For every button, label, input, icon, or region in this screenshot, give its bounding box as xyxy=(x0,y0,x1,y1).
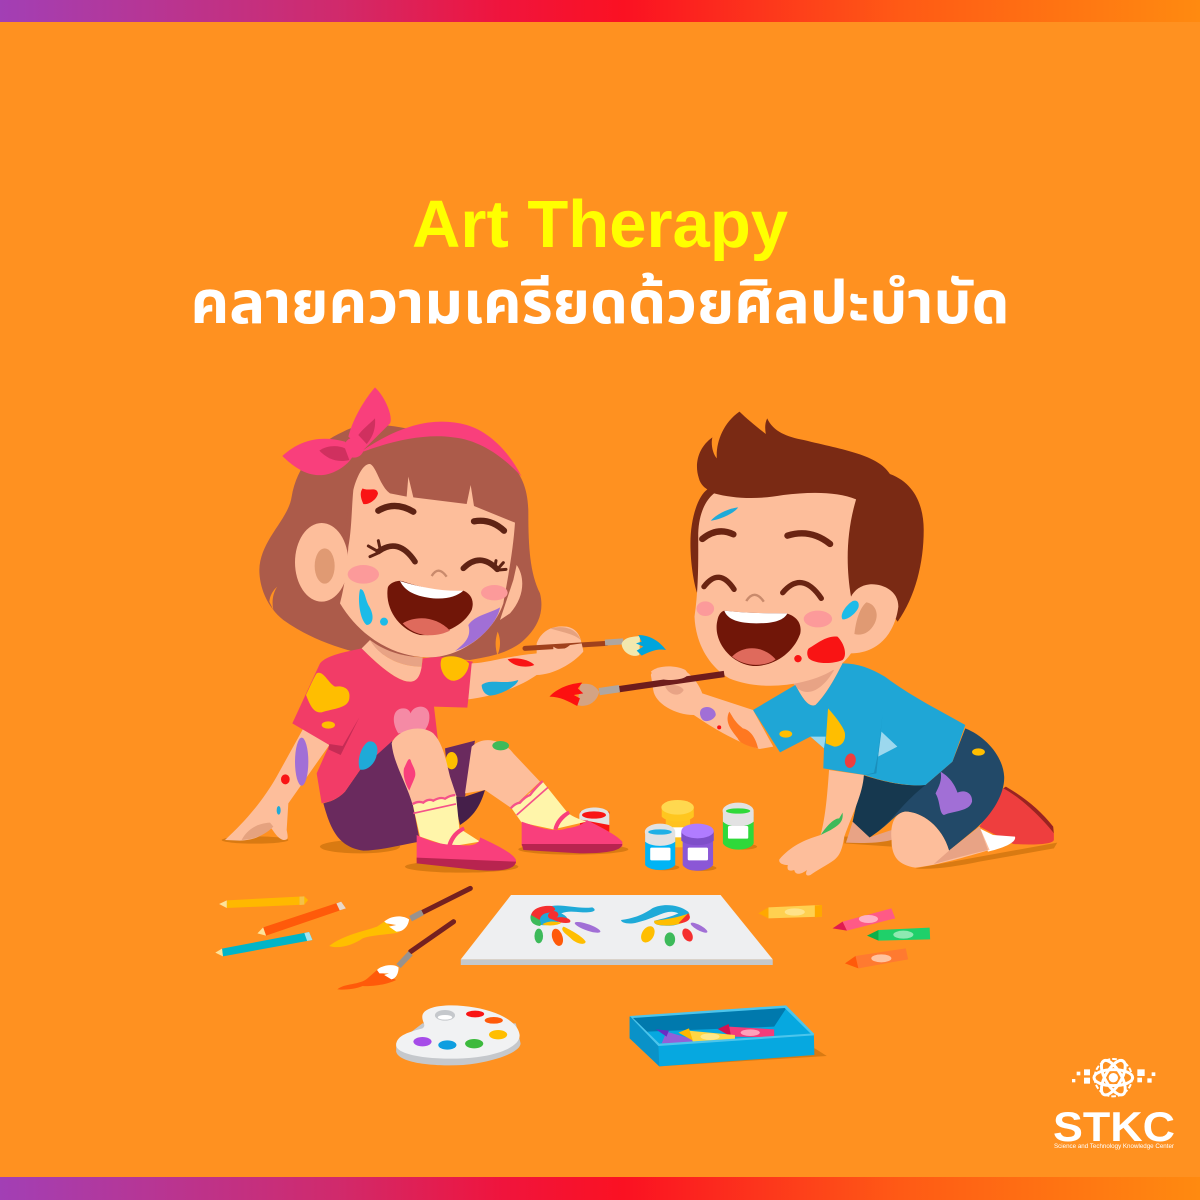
title: Art Therapy: Art Therapy xyxy=(412,187,788,262)
face paint xyxy=(711,507,738,521)
back leg, sock and shoe xyxy=(465,740,540,808)
back arm xyxy=(225,728,329,841)
back lower arm/leg shadow xyxy=(846,822,892,843)
nose xyxy=(432,571,447,577)
shorts xyxy=(853,728,1004,851)
logo tagline: Science and Technology Knowledge Center xyxy=(1054,1144,1174,1150)
illustration: girl painting xyxy=(222,387,666,873)
front leg, sock and shoe xyxy=(392,729,457,805)
sock xyxy=(979,828,1015,852)
hairband and bow xyxy=(282,387,522,477)
ear xyxy=(295,523,348,602)
pencil: teal xyxy=(215,932,312,956)
painting arm and hand xyxy=(651,667,773,749)
shirt xyxy=(753,663,965,785)
pencil: yellow xyxy=(219,896,308,908)
brush: blue xyxy=(525,635,666,656)
bottom gradient bar xyxy=(0,1177,1200,1200)
eyebrows and eyes xyxy=(368,506,506,570)
hair xyxy=(690,412,924,622)
jar: purple xyxy=(681,824,714,871)
nose xyxy=(746,595,764,602)
knee xyxy=(891,812,990,868)
face paint xyxy=(361,488,378,504)
illustration: boy painting xyxy=(549,412,1057,875)
title block xyxy=(190,187,1010,336)
shoe xyxy=(979,788,1054,845)
crayons in box xyxy=(656,1024,774,1043)
logo emblem xyxy=(1072,1057,1155,1098)
brush: yellow paint xyxy=(329,888,470,947)
mouth xyxy=(387,581,473,635)
jar: yellow xyxy=(661,800,694,847)
neck xyxy=(795,663,843,705)
logo wordmark: STKC xyxy=(1053,1103,1175,1150)
handprint: right xyxy=(621,905,709,946)
crayon: green xyxy=(867,928,930,941)
face xyxy=(694,493,898,686)
support arm and hand xyxy=(779,770,864,875)
cheeks xyxy=(697,601,714,616)
face xyxy=(340,464,515,657)
bangs hair detail xyxy=(344,487,352,547)
handprint: left xyxy=(530,906,602,947)
cheeks xyxy=(348,565,379,584)
brush: red xyxy=(549,674,724,706)
jar: blue xyxy=(645,824,675,870)
paint jar behind shoe xyxy=(579,807,609,832)
front arm and hand xyxy=(468,626,583,699)
subtitle in Thai: คลายความเครียดด้วยศิลปะบำบัด xyxy=(190,269,1010,336)
crayon box xyxy=(630,1005,827,1066)
shirt xyxy=(292,648,473,803)
canvas with handprints xyxy=(461,895,773,965)
crayon: yellow xyxy=(758,905,822,918)
logo: STKC xyxy=(1053,1057,1175,1150)
shorts xyxy=(323,740,420,851)
top gradient bar xyxy=(0,0,1200,22)
eyebrows and eyes xyxy=(702,531,830,598)
crayon: orange xyxy=(845,948,908,968)
mouth xyxy=(717,611,801,666)
hair back xyxy=(259,425,541,660)
crayon: pink xyxy=(833,908,895,931)
pencil: orange xyxy=(257,902,346,936)
brush: orange paint xyxy=(337,922,454,990)
art supplies on the floor xyxy=(215,888,930,1066)
group: paint jars xyxy=(645,800,757,871)
jar: green xyxy=(723,803,754,850)
palette xyxy=(396,1005,521,1065)
neck xyxy=(370,640,423,667)
